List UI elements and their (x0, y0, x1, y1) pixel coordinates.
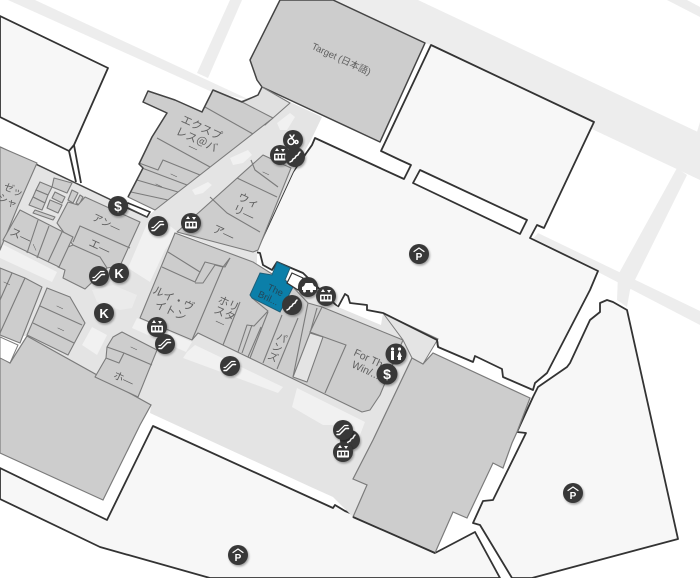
icon: stairs (340, 430, 360, 450)
icon: escalator (220, 356, 240, 376)
store labels (0, 40, 390, 389)
label: small dashes: ― (261, 169, 270, 178)
icon: elevator (316, 286, 336, 306)
label: Polari line 3: ― (214, 316, 226, 329)
icon: ATM: $ (383, 366, 391, 382)
anchor store: south-east (353, 353, 530, 553)
stores: Willy block (177, 155, 291, 252)
label: small dashes: ― (56, 325, 65, 334)
label: Express: エクスプ (179, 113, 224, 143)
stores: west block (0, 147, 140, 289)
icon: kiosk (94, 303, 114, 323)
parking deck: east (473, 300, 678, 578)
parking deck: south (0, 426, 500, 578)
icon: elevator (270, 145, 290, 165)
icon: escalator (148, 216, 168, 236)
label: small dashes: ― (169, 171, 178, 180)
south-east anchor base line (353, 517, 435, 553)
label: A: ア― (211, 223, 236, 243)
label: Louis Vuitton: ルイ・ヴ (151, 283, 197, 314)
light concourse piece east (383, 313, 438, 364)
mall north edge (0, 147, 147, 217)
label: Ho: ホ― (111, 369, 136, 389)
icon: stairs (282, 295, 302, 315)
label: Louis Vuitton line 2: イトン (153, 299, 188, 324)
label: small dashes: ― (154, 181, 163, 190)
label: Express line 2: レス＠バ (174, 125, 219, 155)
parking deck: north-west (0, 16, 108, 151)
label: For The Win: For The (352, 347, 390, 373)
deck access lane right (74, 145, 81, 183)
icon: kiosk (109, 263, 129, 283)
label: small dashes (2, 169, 270, 353)
Express block outer edge (128, 87, 262, 197)
road network (8, 0, 700, 325)
label: Target: Target (日本語) (310, 40, 373, 78)
label: small dashes: ― (129, 344, 138, 353)
label: small dashes: ― (55, 303, 64, 312)
anchor store: south-west (0, 336, 151, 500)
icon: parking (228, 545, 248, 565)
icons (89, 130, 583, 565)
label: small dashes: ― (2, 279, 11, 288)
icon: elevator (181, 213, 201, 233)
parking deck: centre (255, 45, 598, 390)
icon: kiosk: K (99, 306, 109, 321)
white notch north-west (125, 203, 150, 217)
label: Anne: アン― (90, 212, 122, 235)
label: Willy line 2: リ― (231, 203, 256, 223)
icon: ATM: $ (114, 198, 122, 214)
icon: kiosk: K (114, 266, 124, 281)
label: west store: ゼッ (2, 181, 25, 200)
icon: parking (563, 483, 583, 503)
icon: escalator (155, 334, 175, 354)
icon: parking (409, 244, 429, 264)
icon: elevator (147, 317, 167, 337)
white notch west (0, 337, 18, 363)
icon: restrooms (386, 344, 406, 364)
icon: ATM (376, 364, 398, 384)
icon: car (298, 277, 318, 297)
label: Su: ス― (8, 226, 33, 246)
anchor store: Target (250, 0, 425, 142)
stores: central row (140, 233, 403, 412)
light corridor bands (0, 113, 365, 435)
mall concourse floor (0, 102, 438, 517)
label: small dashes: ― (30, 243, 39, 252)
label: The Brilliant line 2: Bril... (256, 289, 280, 308)
stores: south-west block (0, 268, 157, 397)
label: Willy: ウィ (236, 190, 261, 211)
label: Polari: ホリ (216, 293, 241, 314)
label: The Brilliant: The (265, 282, 285, 299)
service slot (413, 170, 527, 234)
icon: stairs (285, 147, 305, 167)
icon: ATM (108, 196, 128, 216)
label: Polari line 2: スタ (212, 303, 237, 324)
icon: escalator (333, 420, 353, 440)
deck edge over east lobby (383, 313, 438, 347)
deck access lane (69, 151, 76, 182)
white courtyard by blue store (287, 273, 303, 290)
store: The Brilliant (highlighted) (250, 262, 293, 312)
icon: elevator (333, 442, 353, 462)
stores: Express block (128, 87, 290, 210)
label: Pans: パンズ (265, 330, 289, 364)
label: E: エ― (87, 237, 112, 257)
label: For The Win line 2: Win/... (350, 359, 382, 382)
label: Express line 3: ― (187, 141, 199, 154)
icon: customer service (283, 130, 303, 150)
icon: escalator (89, 266, 109, 286)
